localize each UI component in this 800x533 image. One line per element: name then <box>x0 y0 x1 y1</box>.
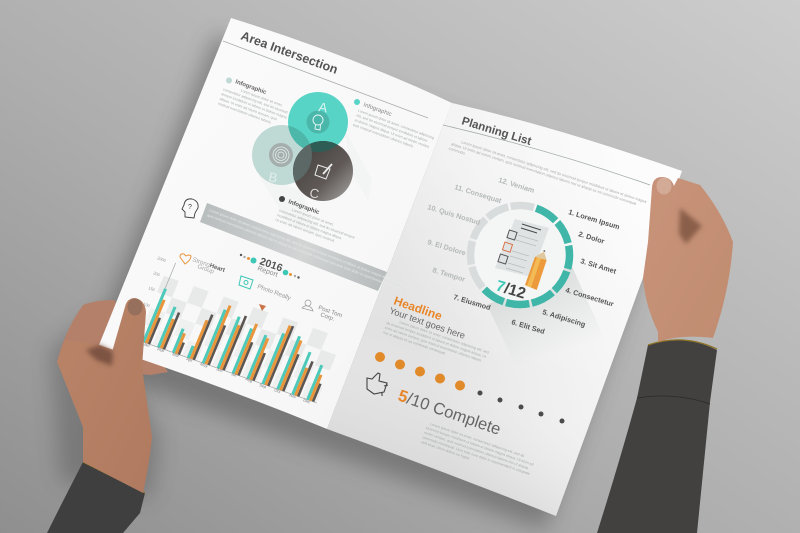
planning list labels: 9. El Dolore <box>426 237 467 257</box>
left page <box>99 18 452 429</box>
right page title: Planning List <box>460 115 533 148</box>
planning list labels: 10. Quis Nostud <box>426 202 481 227</box>
infographic item 1: aliqua. Ut enim ad minim veniam, quis <box>219 97 278 121</box>
chart axes <box>143 263 349 403</box>
icon: target <box>269 143 293 167</box>
headline block: do eiusmod tempor incididunt ut labore et dolore magna aliqua. Ut <box>386 321 487 359</box>
planning list labels: 4. Consectetur <box>564 285 615 309</box>
booklet spread <box>99 18 682 516</box>
left cuff edge <box>83 462 145 493</box>
bottom body text: minim veniam, quis nostrud exercitation ullamco laboris nisi ut aliquip <box>424 431 529 470</box>
icon: pencil <box>525 250 547 290</box>
left title rule <box>223 41 428 118</box>
circle B <box>252 125 312 185</box>
overlap A and B <box>288 126 310 148</box>
icon: checklist document <box>495 219 549 277</box>
icon: head with question mark: ? <box>188 204 192 211</box>
grey banner: quis nostrud exercitation ullamco laboris nisi ut aliquip ex ea commodo consequat duis aute irure dolor in reprehenderit in voluptate <box>207 213 402 292</box>
dark bars <box>148 284 339 402</box>
infographic item 3: Ut enim ad minim veniam, quis nostrud <box>275 218 335 243</box>
headline block <box>382 293 497 369</box>
circle letter B: B <box>267 169 279 185</box>
infographic item 1 <box>217 76 293 129</box>
chart axis values: 200 <box>153 270 161 277</box>
chart month labels: Feb <box>157 346 166 354</box>
ring long shadow <box>487 262 605 385</box>
Venn diagram <box>252 92 353 202</box>
icon: thumbs up <box>367 373 388 396</box>
headline: Headline <box>392 294 444 323</box>
body copy: Lorem ipsum dolor sit amet, <box>240 89 283 107</box>
chart peak marker <box>259 304 266 311</box>
infographic item 2: elit, sed do eiusmod tempor incididunt ut labore <box>356 113 428 143</box>
orange bars <box>145 283 336 401</box>
chart checker background <box>137 276 343 403</box>
chart month labels: Oct <box>274 387 282 394</box>
planning list labels: 2. Dolor <box>577 229 606 246</box>
thumbnail <box>128 298 142 316</box>
icon: user outline <box>302 300 313 311</box>
body copy: Lorem ipsum dolor sit amet, consectetur adipiscing elit, sed <box>399 320 489 355</box>
chart axis values <box>143 255 167 308</box>
icon: item 1 marker <box>226 78 232 84</box>
left page title: Area Intersection <box>239 29 340 77</box>
chart month labels <box>143 341 311 404</box>
chart axis values: 150 <box>148 285 156 292</box>
icon: edit note <box>315 164 332 179</box>
overlap A and C <box>304 141 338 152</box>
chart axis values: 100 <box>143 301 151 308</box>
infographic item 1: tempor incididunt ut labore et dolore magna <box>221 92 287 120</box>
circle A <box>288 92 348 152</box>
planning list labels: 3. Sit Amet <box>579 256 618 276</box>
book drop shadow <box>85 35 670 530</box>
icon: heart outline <box>180 254 191 264</box>
chart month labels: Mar <box>172 351 180 359</box>
bar chart <box>137 261 349 403</box>
completed segments <box>457 192 583 318</box>
bottom body text <box>420 421 536 481</box>
right intro text: commodo. <box>448 147 466 156</box>
heading: Infographic <box>362 102 392 118</box>
right intro text: Lorem ipsum dolor sit amet, consectetur adipiscing elit, sed do eiusmod tempor incididunt ut labore et dolore magna <box>461 140 648 204</box>
infographic item 3: consectetur adipiscing elit, sed do eiusmod tempor <box>278 208 356 240</box>
chart month labels: Aug <box>245 376 253 383</box>
bottom body text: eiusmod tempor incididunt ut labore et dolore magna aliqua. Ut enim ad <box>425 426 534 467</box>
chart month labels: Jul <box>231 371 237 378</box>
chart month labels: Apr <box>186 356 194 363</box>
planning list labels: 12. Veniam <box>497 175 536 195</box>
right cuff edge <box>648 340 717 349</box>
right title rule <box>443 125 650 185</box>
chart axis values: 2000 <box>157 255 167 263</box>
planning list labels: 1. Lorem Ipsum <box>567 207 621 231</box>
infographic item 3 <box>275 197 360 249</box>
teal bars <box>142 288 331 400</box>
left sleeve <box>47 462 145 533</box>
2016 Report heading <box>240 254 300 279</box>
chart month labels: Jun <box>216 366 223 373</box>
planning list labels: 7. Eiusmod <box>452 292 492 312</box>
left hand shadow <box>50 310 160 500</box>
circle C <box>293 141 353 201</box>
infographic item 3: incididunt ut labore et dolore magna aliqua. <box>277 213 343 240</box>
chart month labels: May <box>200 361 208 369</box>
icon: light bulb <box>306 110 330 134</box>
ring score 7/12: 7/12 <box>494 278 528 303</box>
remaining segments <box>450 185 590 325</box>
right intro text: aliqua. Ut enim ad minim veniam, quis nostrud exercitation ullamco laboris nisi ut aliquip ex ea commodo consequat <box>451 142 638 206</box>
heading dots <box>240 254 300 279</box>
progress ring 7 of 12 <box>450 185 590 325</box>
2016 Report heading: Report <box>256 265 279 279</box>
long shadows of Venn circles <box>258 130 372 235</box>
icon: item 2 marker <box>354 99 360 105</box>
body copy: Lorem ipsum dolor sit amet, consectetur adipiscing <box>357 109 435 140</box>
planning list labels: 5. Adipiscing <box>541 307 587 329</box>
finger fold <box>679 208 702 244</box>
planning list labels: 8. Tempor <box>431 265 467 284</box>
cuff seam <box>637 396 710 404</box>
circle letter A: A <box>317 99 329 116</box>
heading: Infographic <box>234 79 268 96</box>
StrongHeart Group label: Group <box>196 263 215 276</box>
infographic item 2: quis nostrud exercitation ullamco laboris <box>352 123 414 149</box>
chart month labels: Sep <box>259 382 268 390</box>
inner disc <box>474 209 566 301</box>
finger fold <box>86 345 113 366</box>
infographic item 1: consectetur adipiscing elit, sed do eiusmod <box>222 87 288 115</box>
rating dots 5 of 10 <box>375 352 564 424</box>
right page <box>327 103 682 516</box>
overlap B and C <box>293 144 312 182</box>
infographic item 1: nostrud exercitation ullamco laboris <box>217 102 272 125</box>
bottom body text: velit esse cillum dolore eu fugiat. <box>420 440 471 461</box>
circle letter C: C <box>308 185 320 202</box>
icon: photo frame <box>239 276 253 289</box>
planning list labels: 11. Consequat <box>453 182 503 205</box>
body copy: Lorem ipsum dolor sit amet, <box>291 208 334 227</box>
infographic item 2 <box>352 101 438 154</box>
banner text: Lorem ipsum dolor sit amet, consectetur adipiscing elit, sed do eiusmod tempor incididunt ut labore et dolore magna aliqua. Ut enim ad minim <box>209 208 420 292</box>
subheadline: Your text goes here <box>388 306 466 341</box>
planning list labels <box>426 175 621 336</box>
right hand and thumb <box>643 177 733 342</box>
icon: head with question mark <box>182 199 198 218</box>
headline block: enim ad minim veniam, quis nostrud exercitation ullamco laboris <box>384 326 482 363</box>
StrongHeart Group label: StrongHeart <box>191 256 226 274</box>
Photo Really label: Photo Really <box>256 283 293 302</box>
headline block: nisi ut aliquip ex ea commodo consequat. <box>383 330 446 356</box>
Post Tom Corp label: Post Tom <box>317 305 343 319</box>
right sleeve <box>597 340 717 533</box>
planning list labels: 6. Elit Sed <box>510 317 546 336</box>
chart month labels: Nov <box>289 392 297 399</box>
Post Tom Corp label: Corp. <box>319 312 335 323</box>
2016 Report heading: 2016 <box>258 255 284 274</box>
thumbnail <box>656 178 672 194</box>
bottom body text: Lorem ipsum dolor sit amet, consectetur adipiscing elit, sed do <box>430 422 525 458</box>
left hand behind the book <box>57 300 168 375</box>
5/10 Complete heading: 5/10 Complete <box>396 387 503 439</box>
chart month labels: Jan <box>143 341 150 348</box>
icon: item 3 marker <box>279 196 285 202</box>
left hand and thumb <box>57 298 152 493</box>
heading: Infographic <box>287 199 321 216</box>
bottom body text: commodo consequat. Duis aute irure dolor in reprehenderit in voluptate <box>422 435 530 476</box>
infographic item 2: et dolore magna aliqua. Ut enim ad minim veniam <box>354 118 430 149</box>
right page lighting <box>327 103 682 516</box>
chart month labels: Dec <box>303 397 311 404</box>
